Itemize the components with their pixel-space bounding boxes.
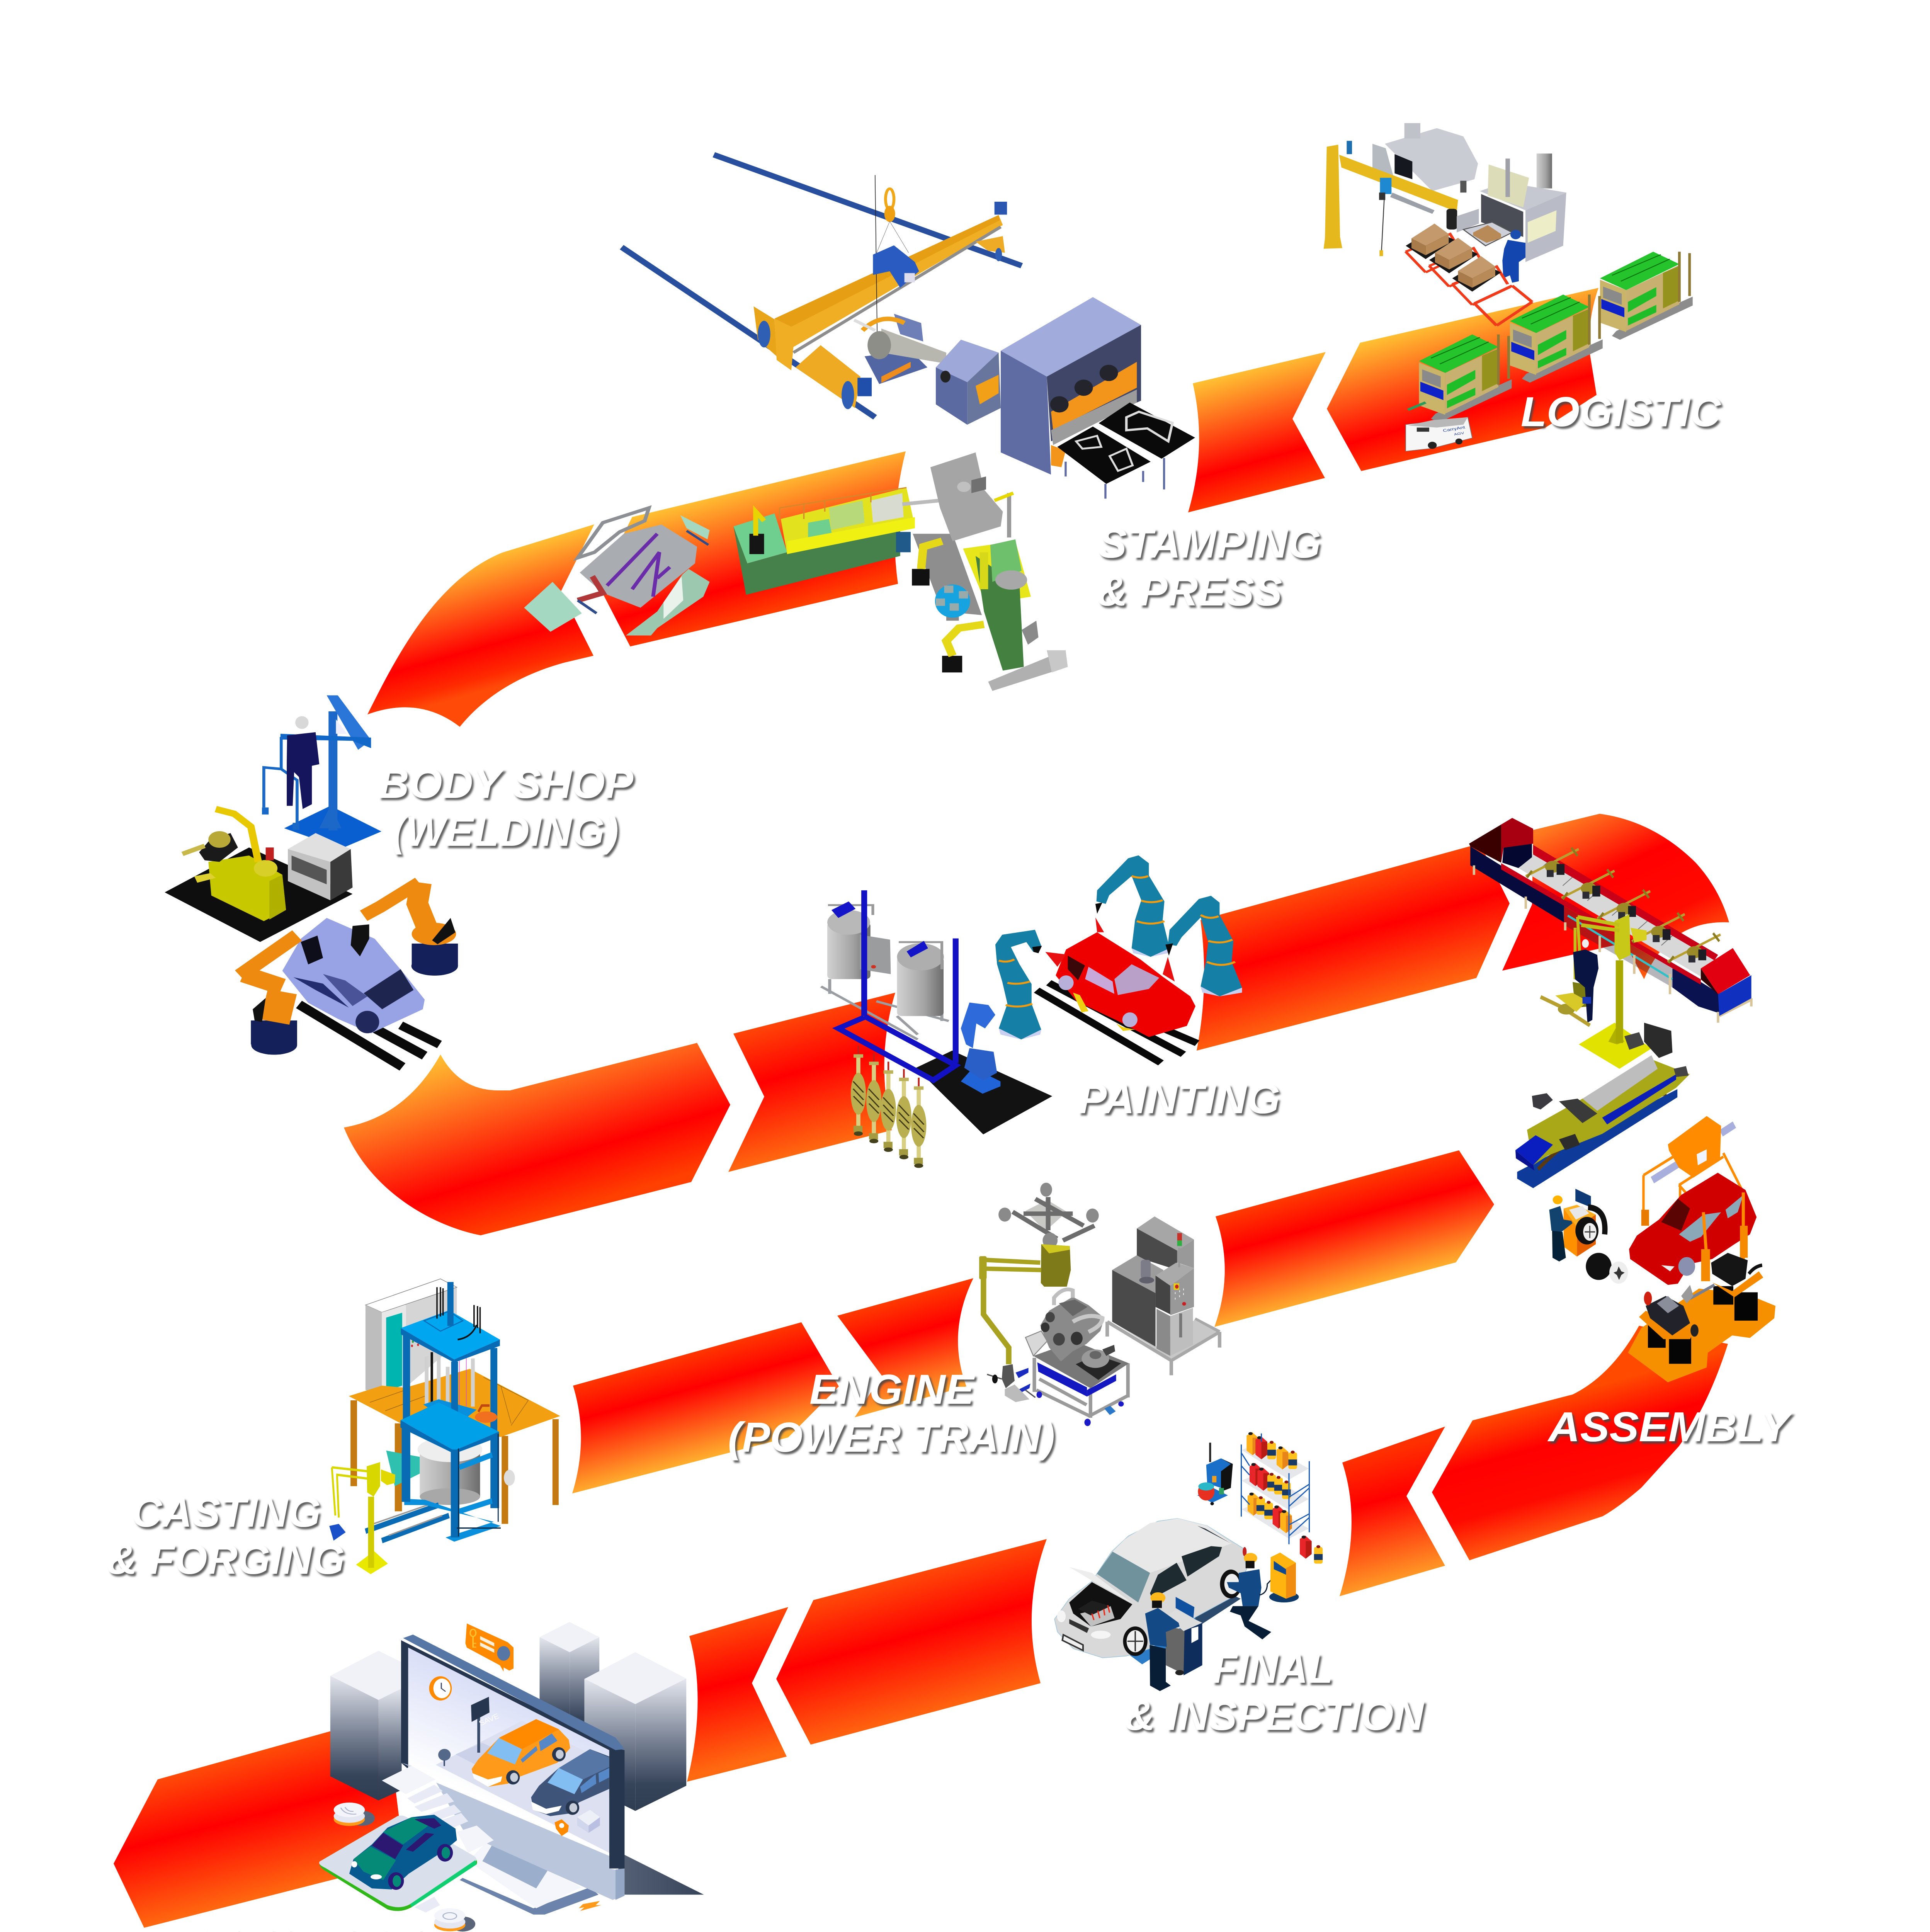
- icon: machine cabinet: [1107, 1216, 1219, 1375]
- icon: overhead bridge crane: [753, 202, 1007, 409]
- icon: leveler unit: [936, 340, 1001, 425]
- icon: blue press tower: [366, 1282, 501, 1542]
- label: engine power train: ENGINE: [809, 1366, 975, 1413]
- label: body shop welding: (WELDING): [391, 808, 619, 855]
- icon: teal painting robots: [995, 855, 1242, 1039]
- label: engine power train: [728, 1366, 1055, 1461]
- icon: powertrain on stands: [1639, 1253, 1763, 1364]
- assembly equipment: [1549, 1116, 1775, 1382]
- label: stamping and press: [1097, 520, 1321, 615]
- ribbon: painting entry curved segment: [344, 1043, 730, 1235]
- icon: AGV vehicle: CarryAnt: [1442, 425, 1466, 433]
- icon: yellow lift arm: [329, 1462, 395, 1574]
- icon: green assembly platform: [733, 488, 915, 595]
- logistic equipment: [1324, 123, 1693, 451]
- icon: lightning bolt: [579, 1901, 601, 1911]
- icon: cleaning cart: [1197, 1443, 1233, 1505]
- icon: red car being painted: [1045, 917, 1195, 1037]
- ribbon: engine right segment: [1214, 1150, 1494, 1327]
- ribbon: final chevron segment: [1340, 1427, 1445, 1596]
- engine power train equipment: [979, 1183, 1219, 1426]
- icon: washing furnace: [1457, 153, 1566, 262]
- body shop welding equipment: [165, 695, 458, 1067]
- icon: stamping press: [1001, 297, 1141, 474]
- icon: blue jib lifter: [262, 695, 381, 849]
- icon: white car with open hood: [1054, 1519, 1246, 1664]
- icon: orange platform: [349, 1369, 560, 1524]
- icon: yellow balancer lift: [1573, 914, 1651, 1069]
- icon: car platform: [319, 1816, 477, 1911]
- label: casting and forging: CASTING: [131, 1489, 321, 1536]
- icon: stairs: [382, 1766, 494, 1912]
- icon: car body on rails: [282, 918, 439, 1067]
- icon: axles on conveyor: [1526, 848, 1721, 963]
- icon: clock: [429, 1676, 452, 1701]
- icon: engine on trolley: [1025, 1289, 1129, 1426]
- icon: sensor disc eye: [434, 1908, 475, 1932]
- ribbon: assembly curved arrow segment: [1432, 1326, 1728, 1560]
- icon: key data card: [465, 1623, 514, 1672]
- ribbon: engine middle segment: [837, 1278, 973, 1417]
- icon: press outfeed tables: [1057, 403, 1195, 498]
- label: casting and forging: & FORGING: [107, 1536, 345, 1583]
- icon: diagnostic cart and laptop: [1166, 1597, 1202, 1675]
- icon: orange gantry hanger: [1641, 1116, 1743, 1274]
- icon: right server tower: [584, 1652, 686, 1811]
- label: logistic: LOGISTIC: [1521, 388, 1721, 435]
- label: casting and forging: [107, 1489, 345, 1583]
- label: painting: PAINTING: [1078, 1075, 1280, 1122]
- icon: orange welding robot left: [240, 935, 297, 1055]
- icon: blue robot: [961, 1002, 1000, 1094]
- ribbon: painting chevron segment: [728, 993, 895, 1172]
- ribbon: logistic arrow segment: [1327, 288, 1598, 471]
- icon: arm gripper: [987, 1364, 1036, 1402]
- ribbon: painting right segment: [1197, 844, 1510, 1051]
- icon: ground shadow: [607, 1855, 704, 1895]
- icon: orange skid base: [1628, 1289, 1775, 1382]
- icon: spare can and bottle: [1300, 1536, 1323, 1564]
- icon: yellow fuel pump: [1259, 1553, 1299, 1602]
- icon: sensor disc wifi: [334, 1803, 375, 1826]
- icon: dark blue car on screen: [531, 1749, 609, 1816]
- engine axle conveyor and chassis fixture: [1469, 818, 1751, 1188]
- icon: jib crane: [1324, 141, 1458, 256]
- icon: save sign: SAVE: [477, 1713, 502, 1727]
- database isometric scene: [319, 1622, 704, 1932]
- body production line: [524, 452, 1068, 691]
- casting and forging equipment: [329, 1279, 560, 1574]
- icon: crane rails: [622, 155, 1022, 417]
- icon: green car: [349, 1815, 457, 1890]
- final inspection scene: [1054, 1432, 1323, 1691]
- label: engine power train: (POWER TRAIN): [728, 1414, 1055, 1461]
- ribbon: stamping chevron segment: [1188, 352, 1326, 512]
- icon: outfeed conveyor: [988, 621, 1068, 691]
- label: final and inspection: [1125, 1645, 1425, 1739]
- icon: operator: [1573, 939, 1598, 1023]
- icon: hanging axles: [851, 1046, 926, 1168]
- icon: operator figure: [287, 716, 319, 809]
- label: final and inspection: & INSPECTION: [1125, 1692, 1425, 1739]
- icon: black base plate: [165, 847, 352, 942]
- stamping and press equipment: [622, 155, 1195, 498]
- icon: AGV vehicle: [1406, 417, 1472, 451]
- ribbon: press to body segment: [599, 451, 906, 646]
- label: body shop welding: [378, 760, 633, 855]
- icon: AGV vehicle: AGV: [1454, 431, 1465, 436]
- icon: overhead hanger frame: [998, 1183, 1099, 1248]
- icon: control cabinets: [366, 1279, 457, 1398]
- icon: control cabinet: [288, 833, 352, 900]
- icon: yellow welding robot cell: [182, 809, 286, 921]
- icon: red car on hanger: [1629, 1173, 1757, 1285]
- icon: left server tower: [330, 1651, 402, 1800]
- icon: olive articulated arm: [979, 1244, 1071, 1364]
- icon: inspector front: [1145, 1592, 1180, 1691]
- icon: back server tower: [540, 1622, 599, 1738]
- ribbon: body shop curved segment: [367, 524, 594, 727]
- icon: green parts carts: [1408, 252, 1693, 423]
- icon: oven unit: [1372, 123, 1478, 192]
- icon: transfer press: [902, 452, 1031, 671]
- icon: axle held by lift: [1541, 993, 1591, 1026]
- label: stamping and press: STAMPING: [1098, 520, 1321, 567]
- icon: map pin and box: [554, 1810, 600, 1836]
- icon: save sign: [438, 1697, 502, 1766]
- painting equipment: [821, 855, 1242, 1168]
- icon: conveyor line: [1469, 818, 1751, 1023]
- icon: inspector at wheel: [1227, 1553, 1271, 1639]
- icon: crane hoist and hook: [873, 175, 919, 334]
- icon: chassis fixture: [1515, 1023, 1690, 1188]
- icon: oil rack: [1241, 1432, 1309, 1544]
- icon: paint tanks: [821, 901, 949, 1039]
- ribbon: database arrow head segment: [114, 1716, 399, 1928]
- icon: blue gantry frame: [838, 890, 1052, 1134]
- icon: orange welding robot right: [351, 883, 458, 976]
- label: body shop welding: BODY SHOP: [378, 760, 633, 807]
- label: final and inspection: FINAL: [1212, 1645, 1333, 1692]
- ribbon: database chevron segment: [687, 1607, 788, 1782]
- icon: monitor stand and base: [460, 1840, 599, 1915]
- ribbon: upper bend segment: [1502, 814, 1729, 979]
- icon: car rails: [1037, 983, 1197, 1063]
- icon: worker in blue: [1502, 230, 1525, 283]
- icon: coil feeder: [854, 314, 946, 384]
- icon: orange car on screen: [472, 1719, 570, 1787]
- icon: boxes on carts: [1406, 224, 1532, 326]
- ribbon: casting segment: [572, 1322, 839, 1493]
- label: stamping and press: & PRESS: [1097, 568, 1282, 615]
- icon: blue turntable: [935, 585, 970, 621]
- icon: monitor screen and bezel: [401, 1634, 624, 1900]
- ribbon: inspection segment: [776, 1539, 1047, 1745]
- label: assembly: ASSEMBLY: [1547, 1403, 1793, 1451]
- icon: drum furnace: [386, 1437, 515, 1505]
- icon: body-in-white and panels: [524, 508, 710, 636]
- icon: wheel balancer with worker: [1549, 1189, 1628, 1284]
- icon: yellow handling robots: [912, 541, 984, 672]
